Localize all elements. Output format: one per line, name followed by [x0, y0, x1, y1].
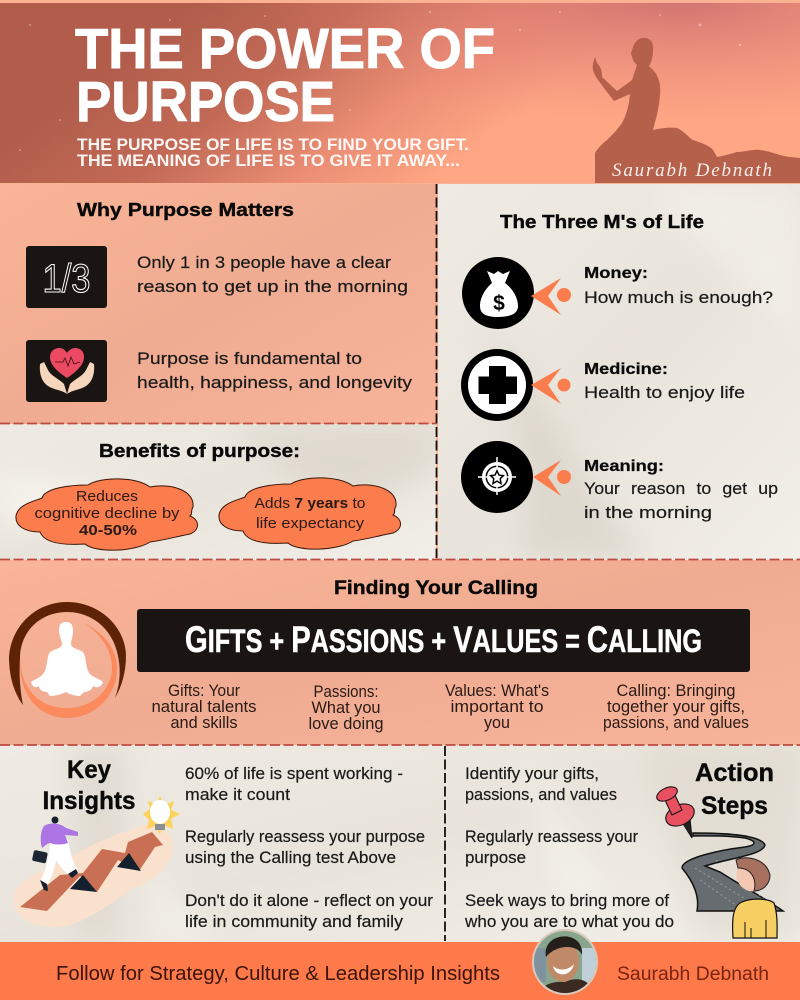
callout: seven years: life expectancy	[256, 515, 365, 532]
road	[682, 833, 783, 911]
subtitle	[77, 136, 469, 170]
list: key insights: using the Calling test Above	[185, 848, 396, 867]
text: one in three: Only 1 in 3 people have a clear	[137, 253, 391, 272]
figure: walking person	[32, 816, 78, 891]
text: meaning	[584, 458, 778, 522]
heading: key insights: Key	[67, 756, 111, 784]
list: action steps: Seek ways to bring more of	[465, 891, 669, 910]
head	[736, 858, 770, 892]
panel: benefits of purpose	[0, 424, 436, 560]
callout: cognitive decline: cognitive decline by	[34, 505, 180, 522]
heading: action steps: Action	[695, 759, 774, 787]
pin	[654, 784, 698, 838]
text: medicine: Medicine:	[584, 361, 668, 378]
caption: values: important to	[450, 698, 544, 716]
icon: meditating figure in circle	[9, 602, 126, 718]
illustration: pin, road and person	[654, 784, 783, 938]
heading: action steps: Steps	[701, 792, 768, 820]
icon: money bag: $	[493, 292, 505, 315]
list: key insights: Regularly reassess your purpose	[185, 827, 425, 846]
heading: Benefits of purpose:	[99, 440, 300, 461]
caption: passions: What you	[312, 699, 380, 717]
subtitle: THE PURPOSE OF LIFE IS TO FIND YOUR GIFT.	[77, 136, 469, 154]
heading: action steps	[695, 759, 774, 820]
callout: seven years	[219, 478, 400, 549]
text: meaning: Meaning:	[584, 458, 664, 475]
caption: calling: passions, and values	[603, 714, 749, 732]
icon: money bag	[462, 257, 534, 329]
text: meaning: in the morning	[584, 503, 712, 522]
callout: cognitive decline: Reduces	[76, 488, 138, 505]
list: key insights: Don't do it alone - reflect on your	[185, 891, 433, 910]
caption: calling: together your gifts,	[607, 698, 745, 716]
list: action steps: who you are to what you do	[464, 912, 674, 931]
caption: passions	[308, 683, 384, 733]
callout: cognitive decline: 40-50%	[79, 522, 137, 539]
list: action steps: purpose	[465, 848, 526, 867]
subtitle: THE MEANING OF LIFE IS TO GIVE IT AWAY...	[77, 152, 460, 170]
icon: light bulb	[143, 796, 180, 834]
panel: why purpose matters	[0, 184, 436, 424]
heading: The Three M's of Life	[500, 211, 704, 232]
text: fundamental	[137, 349, 413, 392]
icon: target star	[461, 441, 533, 513]
text: fundamental: health, happiness, and longevity	[137, 373, 413, 392]
panel: finding your calling	[0, 560, 800, 745]
illustration: climbing stairs to idea	[14, 796, 180, 927]
list: key insights: make it count	[185, 785, 290, 804]
title: PURPOSE	[76, 70, 335, 134]
heading: Why Purpose Matters	[77, 199, 294, 220]
arrow: medicine	[531, 368, 570, 404]
text: money: How much is enough?	[584, 288, 773, 307]
title	[75, 17, 495, 134]
icon: heart in hands	[26, 340, 107, 402]
caption: gifts: Gifts: Your	[168, 682, 240, 700]
list: key insights	[185, 764, 433, 931]
footer	[0, 929, 800, 1000]
caption: values	[445, 682, 549, 732]
footer text: Follow for Strategy, Culture & Leadership Insights	[56, 963, 500, 985]
caption: passions: Passions:	[314, 683, 378, 701]
panel: three Ms of life	[438, 184, 800, 560]
author name: Saurabh Debnath	[617, 964, 769, 985]
heading: key insights: Insights	[42, 787, 136, 815]
signature: Saurabh Debnath	[612, 160, 772, 181]
callout: seven years: Adds 7 years to	[254, 495, 366, 512]
text: one in three	[137, 253, 408, 296]
text: medicine: Health to enjoy life	[584, 383, 745, 402]
text: medicine	[584, 361, 745, 402]
arrow: money	[531, 278, 571, 315]
heading: key insights	[42, 756, 136, 815]
title: THE POWER OF	[75, 17, 495, 81]
list: key insights: life in community and family	[185, 912, 404, 931]
heading: Finding Your Calling	[334, 578, 538, 599]
list: action steps: Regularly reassess your	[465, 827, 638, 846]
stat icon: one third	[26, 246, 107, 308]
text: money	[584, 265, 773, 307]
caption: calling	[603, 682, 749, 732]
panel: key insights and action steps	[0, 745, 800, 942]
list: key insights: 60% of life is spent working -	[185, 764, 403, 783]
text: one in three: reason to get up in the morning	[137, 277, 408, 296]
silhouette: person on rock	[593, 38, 800, 183]
caption: gifts: and skills	[170, 714, 238, 732]
stat icon: one third: 1/3	[42, 257, 90, 301]
formula banner	[137, 609, 750, 672]
list: action steps: passions, and values	[465, 785, 617, 804]
caption: gifts: natural talents	[152, 698, 256, 716]
caption: values: you	[484, 714, 510, 732]
caption: calling: Calling: Bringing	[616, 682, 736, 700]
text: money: Money:	[584, 265, 648, 282]
portrait	[532, 929, 598, 995]
list: action steps: Identify your gifts,	[465, 764, 599, 783]
icon: medical cross	[461, 349, 533, 421]
text: meaning: Your reason to get up	[584, 479, 778, 498]
list: action steps	[464, 764, 674, 931]
arrow: meaning	[533, 460, 571, 496]
caption: gifts	[152, 682, 256, 732]
formula banner: GIFTS + PASSIONS + VALUES = CALLING	[185, 619, 702, 660]
caption: values: Values: What's	[445, 682, 549, 700]
caption: passions: love doing	[308, 715, 384, 733]
panel: header banner	[0, 3, 800, 183]
callout: cognitive decline	[16, 479, 198, 550]
shirt	[733, 899, 777, 938]
text: fundamental: Purpose is fundamental to	[137, 349, 362, 368]
